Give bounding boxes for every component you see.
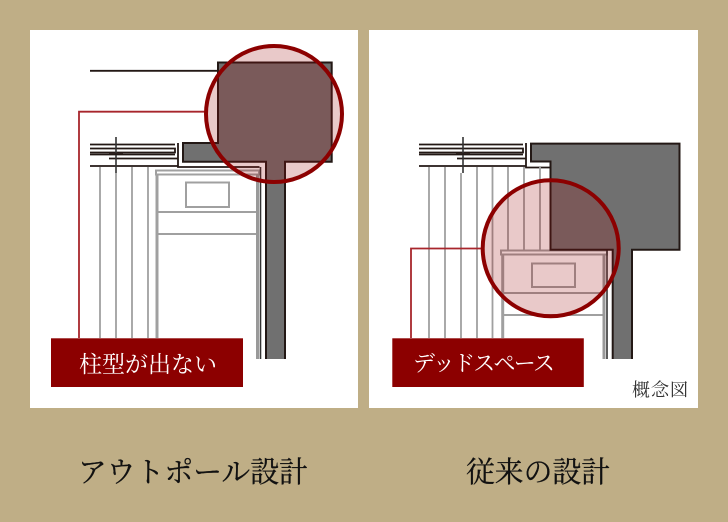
label: dead space bbox=[392, 338, 584, 387]
magnifier circle bbox=[206, 46, 342, 182]
outpole column bbox=[183, 62, 332, 359]
panel: conventional design bbox=[369, 30, 698, 408]
label: dead space: デッドスペース bbox=[413, 351, 555, 376]
leader line bbox=[411, 248, 481, 338]
note: conceptual diagram: 概念図 bbox=[632, 380, 689, 400]
label: no column protrusion bbox=[51, 338, 243, 387]
plan drawing: window and wall lines bbox=[419, 137, 607, 359]
panel: outpole design bbox=[30, 30, 358, 408]
magnifier circle bbox=[483, 180, 619, 316]
heading: conventional design: 従来の設計 bbox=[466, 457, 610, 489]
heading: outpole design: アウトポール設計 bbox=[78, 457, 308, 489]
conventional column bbox=[531, 144, 680, 359]
leader line bbox=[79, 112, 205, 338]
label: no column protrusion: 柱型が出ない bbox=[79, 352, 217, 377]
plan drawing: window and wall lines bbox=[90, 71, 260, 359]
